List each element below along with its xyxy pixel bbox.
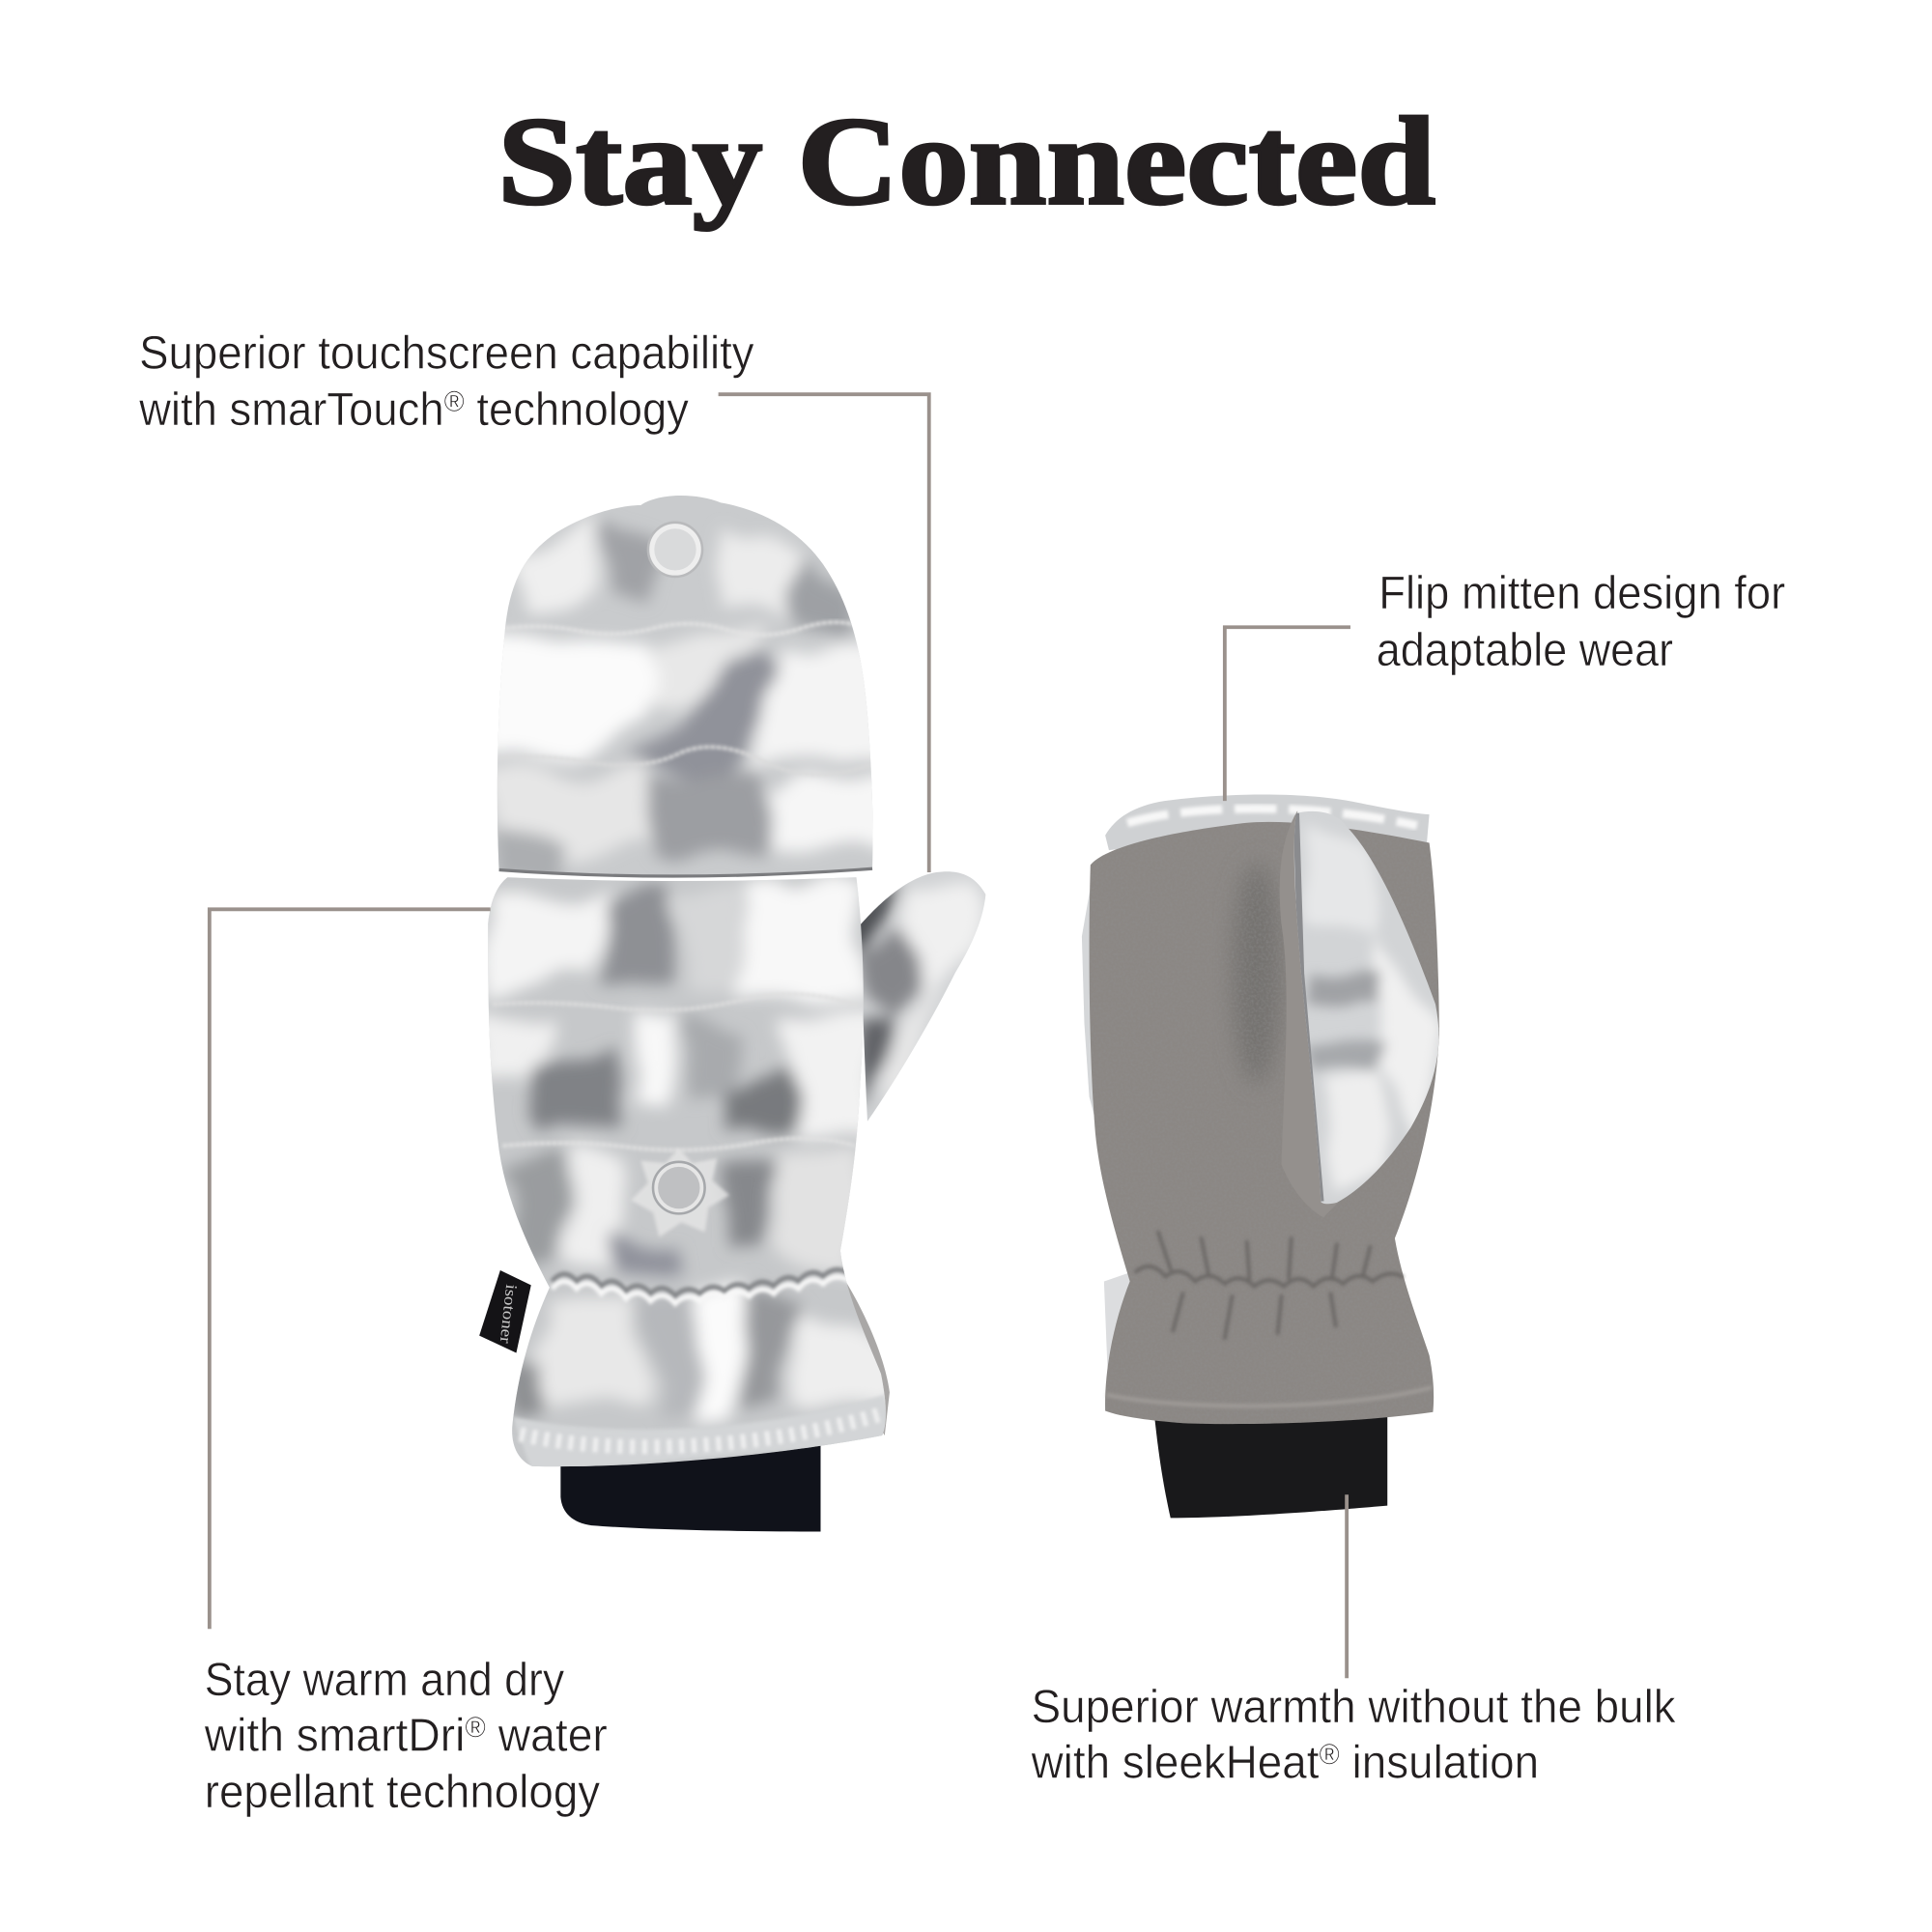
callout text: touchscreen: technology [465, 384, 690, 436]
left mitten: silver back view [479, 487, 992, 1531]
thumb flap fleece edge [1280, 810, 1338, 1217]
callout text: flip mitten: adaptable wear [1377, 624, 1673, 676]
callout text: water repellant: repellant technology [205, 1766, 601, 1818]
silver edge on outer side [1082, 863, 1140, 1233]
main mitten body [480, 868, 894, 1472]
callout text: insulation: insulation [1340, 1737, 1539, 1789]
leader line: touchscreen [719, 394, 929, 872]
right mitten: fleece palm view [1082, 795, 1448, 1518]
silver top band [1105, 795, 1430, 850]
quilted stitching [493, 994, 858, 1010]
fleece shading [1233, 863, 1282, 1084]
leader line: flip mitten [1225, 627, 1350, 801]
title: Stay Connected [497, 92, 1435, 231]
callout text: insulation: ® [1320, 1739, 1340, 1772]
wrist gathers [1136, 1233, 1403, 1338]
callout text: touchscreen: Superior touchscreen capability [139, 327, 754, 379]
callout text: water repellant: with smartDri [205, 1710, 477, 1762]
callout text: water repellant: water [486, 1709, 608, 1761]
grey lining peeking at wrist [838, 1269, 890, 1435]
brand tag: isotoner [497, 1284, 521, 1345]
hem highlight [1106, 1387, 1432, 1406]
callout text: water repellant: ® [465, 1711, 486, 1744]
callout text: flip mitten: Flip mitten design for [1378, 567, 1785, 619]
snap button on flip cover [648, 523, 702, 577]
leader line: insulation [1346, 1494, 1349, 1678]
fleece grain [1090, 822, 1439, 1424]
black knit cuff [1153, 1405, 1387, 1518]
hem band [513, 1395, 890, 1472]
flip stitching [505, 622, 865, 635]
thumb opening silver lining [1294, 811, 1439, 1204]
callout text: touchscreen [138, 327, 754, 436]
gathered elastic [552, 1269, 850, 1296]
fleece body [1090, 822, 1439, 1424]
thumb [861, 871, 985, 1121]
callout text: insulation [1031, 1681, 1676, 1789]
brand tag [479, 1270, 531, 1353]
black ribbed cuff [560, 1441, 820, 1531]
callout text: insulation: with sleekHeat [1032, 1737, 1336, 1789]
leader line: water repellant [210, 909, 491, 1629]
callout text: touchscreen: ® [444, 385, 465, 418]
callout text: water repellant [204, 1654, 608, 1818]
snap button on palm [631, 1149, 729, 1237]
flip cover edge [499, 868, 872, 876]
callout text: water repellant: Stay warm and dry [205, 1654, 565, 1706]
callout text: flip mitten [1377, 567, 1785, 676]
flip cover [497, 496, 873, 875]
callout text: insulation: Superior warmth without the bulk [1032, 1681, 1676, 1733]
callout text: touchscreen: with smarTouch [139, 384, 465, 436]
